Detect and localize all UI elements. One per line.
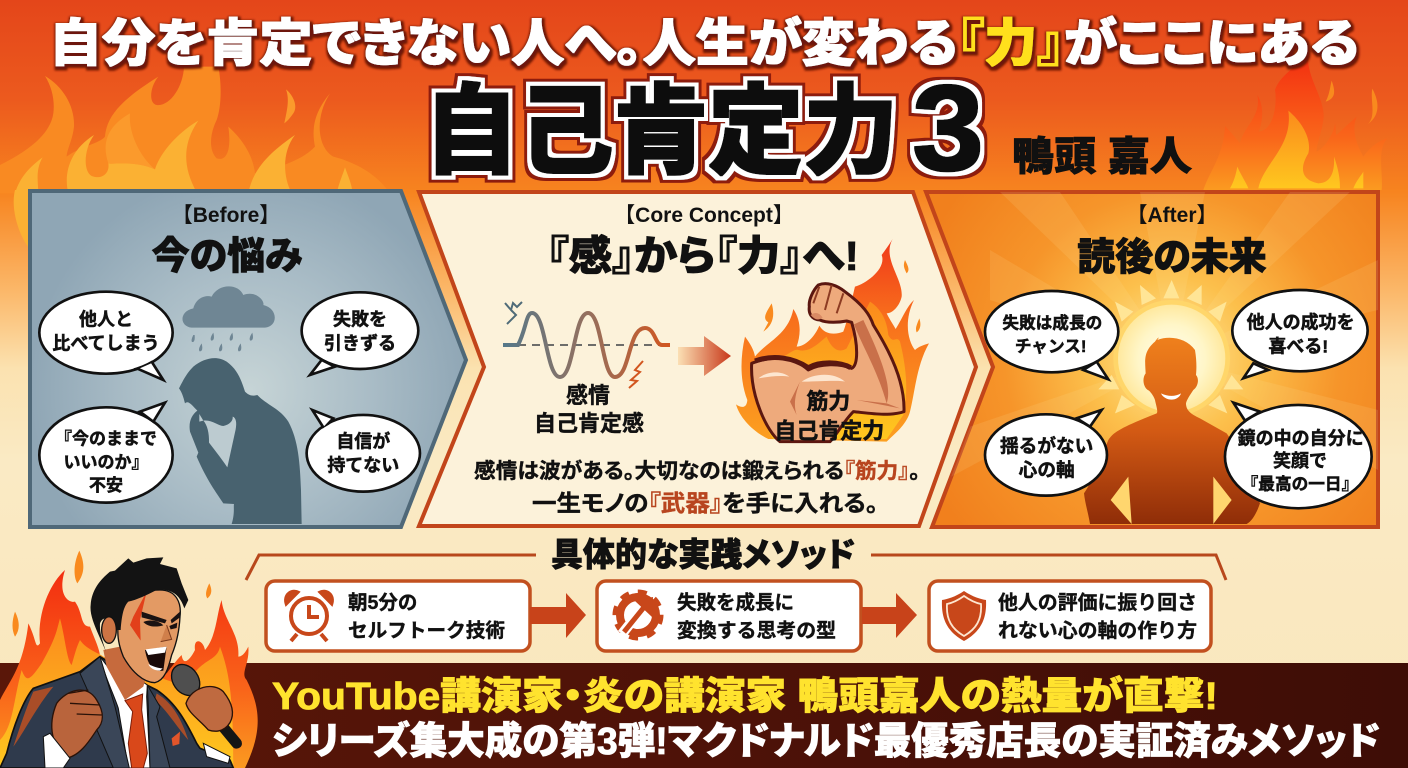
panel: before xyxy=(30,191,466,527)
speech bubble: chance: 失敗は成長の xyxy=(1002,313,1102,333)
method card: inner axis: れない心の軸の作り方 xyxy=(998,619,1197,642)
banner text: subheading: シリーズ集大成の第3弾!マクドナルド最優秀店長の実証済みメソッド xyxy=(272,720,1380,763)
angry eyes xyxy=(142,612,180,629)
heading: future: 読後の未来 xyxy=(1077,237,1267,279)
chart: emotion wave xyxy=(503,302,670,388)
speech bubble: confidence: 持てない xyxy=(327,455,399,475)
text: inner axis: 他人の評価に振り回さ xyxy=(998,592,1197,614)
icon: radiating sun xyxy=(1098,280,1243,414)
author name: 鴨頭 嘉人 xyxy=(1012,135,1192,179)
ear xyxy=(102,617,116,643)
arrow: step two to three xyxy=(862,593,917,638)
shirt cuff xyxy=(43,733,70,768)
icon: shield xyxy=(942,591,986,641)
speech bubble: steady core: 心の軸 xyxy=(1019,459,1075,480)
method card: self talk xyxy=(266,581,530,651)
speech bubble: others' success xyxy=(1232,290,1368,378)
speaker illustration xyxy=(0,551,258,768)
method card: self talk: セルフトーク技術 xyxy=(348,619,505,642)
speech bubble: mirror smile: 鏡の中の自分に xyxy=(1238,428,1364,448)
shouting mouth xyxy=(145,647,167,671)
arrow: emotion to muscle xyxy=(678,336,731,376)
war paint xyxy=(130,592,147,641)
top headline: 自分を肯定できない人へ。人生が変わる 『力』がここにある xyxy=(49,15,1359,72)
speech bubble: others' success: 喜べる! xyxy=(1268,337,1328,357)
speech bubble: compare: 比べてしまう xyxy=(52,333,160,353)
speech bubble: chance xyxy=(985,291,1118,379)
panel: core concept xyxy=(419,192,976,526)
speech bubble: compare xyxy=(39,292,173,380)
clenched fist xyxy=(52,690,102,758)
hand on microphone xyxy=(186,687,233,731)
label: muscle: 筋力 xyxy=(806,389,850,414)
nose xyxy=(161,625,172,642)
panel shape: after xyxy=(926,192,1378,527)
heading: from feeling to power: 『感』から『力』へ! xyxy=(547,233,859,279)
label: after: 【After】 xyxy=(1126,204,1218,227)
left lapel xyxy=(80,657,129,768)
main title: 自己肯定力 xyxy=(424,76,898,186)
speech bubble: anxiety: いいのか』 xyxy=(64,453,148,472)
label: self-esteem feeling: 自己肯定感 xyxy=(534,411,644,436)
icon: confident person silhouette xyxy=(1084,338,1260,524)
panel: after xyxy=(926,192,1378,527)
bottom banner xyxy=(0,663,1408,768)
face xyxy=(118,590,180,683)
icon: worried man silhouette xyxy=(179,358,302,524)
speech bubble: confidence: 自信が xyxy=(336,431,390,452)
panel shape: before xyxy=(30,191,466,527)
neck xyxy=(103,647,147,700)
heading: worries: 今の悩み xyxy=(152,236,302,278)
background flames right xyxy=(1203,53,1387,190)
banner text: headline: YouTube講演家・炎の講演家 鴨頭嘉人の熱量が直撃! xyxy=(272,675,1218,718)
heading: practical methods: 具体的な実践メソッド xyxy=(551,536,855,573)
text: self talk: 朝5分の xyxy=(348,592,417,614)
body text xyxy=(474,459,920,516)
speech bubble: steady core xyxy=(985,410,1107,496)
background flames left xyxy=(0,67,390,247)
panel shape: core xyxy=(419,192,976,526)
microphone xyxy=(166,659,237,743)
body text: 感情は波がある。大切なのは鍛えられる 『筋力』。 xyxy=(474,459,920,483)
main title: 3 xyxy=(912,60,984,196)
speech bubble: mirror smile xyxy=(1225,403,1372,508)
methods section xyxy=(246,536,1226,651)
speech bubbles: before xyxy=(39,292,420,503)
arrow: step one to two xyxy=(530,593,586,638)
right lapel xyxy=(147,685,170,768)
speech bubble: anxiety xyxy=(39,403,173,503)
speech bubble: anxiety: 『今のままで xyxy=(55,428,157,448)
suit xyxy=(0,657,233,768)
hair xyxy=(91,557,188,652)
text: reframing: 失敗を成長に xyxy=(677,591,794,614)
speech bubble: others' success: 他人の成功を xyxy=(1247,312,1355,333)
label: self-esteem power: 自己肯定力 xyxy=(774,418,884,443)
icon: flaming flexed arm xyxy=(736,239,929,443)
icon: radiating sun and confident person xyxy=(1084,280,1260,524)
label: before: 【Before】 xyxy=(172,204,280,227)
speech bubble: anxiety: 不安 xyxy=(89,476,123,495)
tie xyxy=(125,694,147,768)
flames behind speaker xyxy=(0,551,258,768)
body text: 一生モノの 『武器』を手に入れる。 xyxy=(532,490,878,516)
right cuff xyxy=(203,743,230,763)
speech bubble: chance: チャンス! xyxy=(1015,337,1086,356)
speech bubble: mirror smile: 笑顔で xyxy=(1273,451,1327,471)
label: core concept: 【Core Concept】 xyxy=(614,204,794,227)
speech bubble: failure: 引きずる xyxy=(324,333,396,353)
speech bubble: compare: 他人と xyxy=(79,309,133,329)
method card: reframing: 変換する思考の型 xyxy=(677,619,836,642)
speech bubble: failure xyxy=(302,292,418,375)
speech bubbles: after xyxy=(985,290,1372,508)
speech bubble: steady core: 揺るがない xyxy=(1000,436,1093,457)
label: emotion: 感情 xyxy=(566,383,610,408)
icon: gear with arrow xyxy=(615,592,661,638)
icon: rain cloud xyxy=(182,286,275,351)
method card: reframing xyxy=(597,581,861,651)
pocket square xyxy=(172,732,180,746)
speech bubble: failure: 失敗を xyxy=(333,309,387,329)
speech bubble: confidence xyxy=(307,410,420,492)
speech bubble: mirror smile: 『最高の一日』 xyxy=(1242,474,1358,494)
background sun rays xyxy=(945,192,1378,480)
method card: inner axis xyxy=(929,581,1211,651)
shirt xyxy=(100,657,150,768)
icon: alarm clock xyxy=(285,591,333,641)
